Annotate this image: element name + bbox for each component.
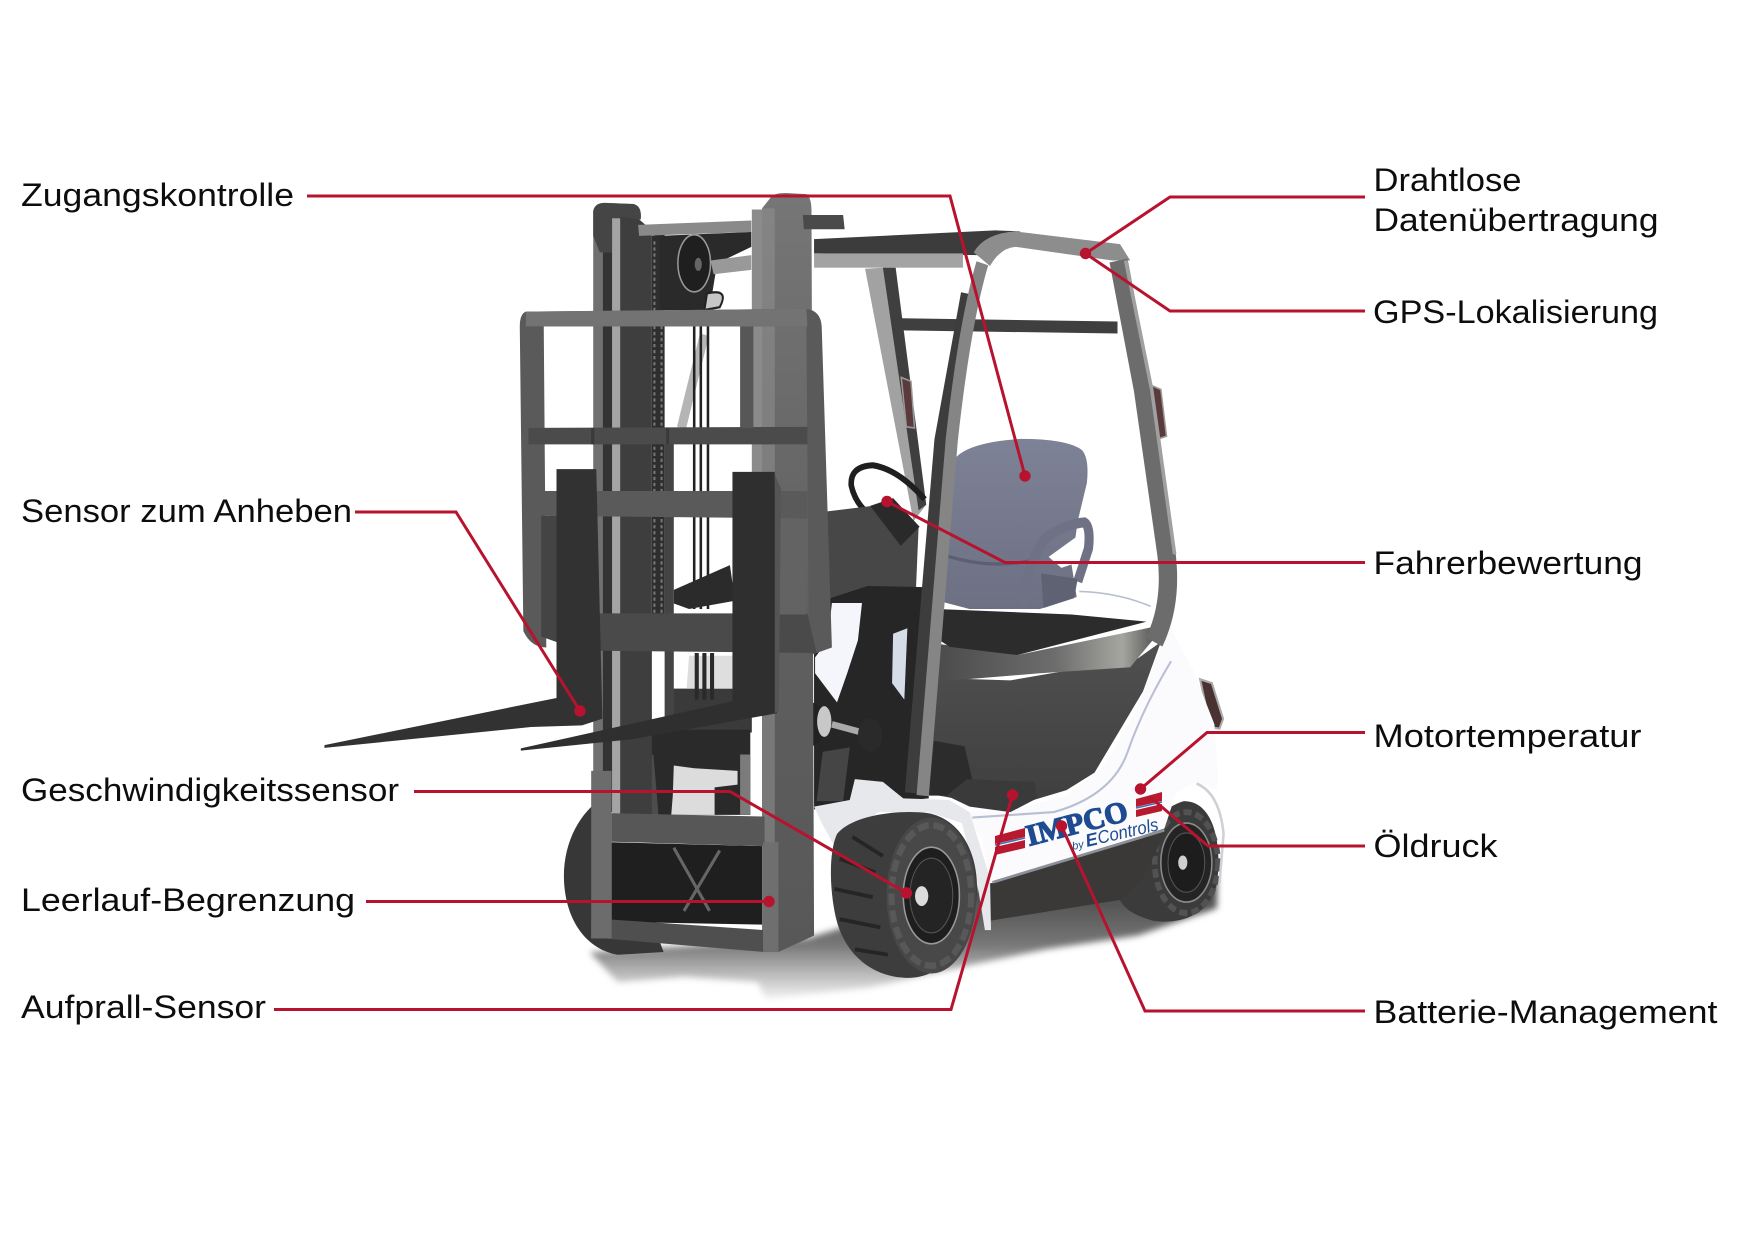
- forks: [324, 469, 781, 751]
- leader: Öldruck: [1150, 797, 1365, 846]
- logo: red stripes left: [995, 828, 1025, 855]
- underbody: [985, 831, 1166, 921]
- far front wheel: [564, 798, 664, 955]
- rear light: [1200, 679, 1223, 729]
- cabin rear lights: [901, 377, 1166, 439]
- seat: [938, 439, 1089, 609]
- white body shell: [964, 628, 1224, 883]
- logo: by Controls: E: [1083, 828, 1101, 851]
- logo: by Controls: by: [1071, 838, 1086, 853]
- label: Sensor zum Anheben: Sensor zum Anheben: [21, 493, 352, 529]
- leader: Drahtlose Datenübertragung: [1080, 197, 1365, 259]
- leader: Aufprall-Sensor: [274, 789, 1018, 1010]
- front wheel: [831, 812, 977, 978]
- label: Batterie-Management: Batterie-Management: [1374, 994, 1718, 1030]
- ground shadow: [590, 878, 1217, 999]
- cage front posts: [911, 263, 982, 796]
- label: Drahtlose Datenübertragung: Drahtlose: [1374, 162, 1522, 198]
- mast cross members: [591, 771, 778, 952]
- forklift illustration: [324, 193, 1224, 999]
- mast back interior: [612, 689, 763, 925]
- steering link: [787, 701, 882, 801]
- leader: Motortemperatur: [1135, 732, 1365, 795]
- mast left upright: [591, 203, 674, 938]
- leader: Leerlauf-Begrenzung: [366, 896, 775, 907]
- leader: Fahrerbewertung: [881, 496, 1365, 562]
- logo: IMPCO: IMPCO: [1022, 795, 1131, 853]
- fork carriage bars: [540, 491, 817, 653]
- far cage post: [865, 268, 926, 521]
- leader: Geschwindigkeitssensor: [414, 792, 912, 899]
- label: Aufprall-Sensor: Aufprall-Sensor: [21, 989, 266, 1025]
- hydraulic hoses: [687, 656, 732, 689]
- label: Drahtlose Datenübertragung: Datenübertragung: [1374, 202, 1658, 238]
- logo: red stripes right: [1136, 792, 1162, 817]
- load backrest: [520, 309, 832, 656]
- mast right upright: [752, 193, 845, 952]
- rear wheel: [1120, 801, 1218, 922]
- label: GPS-Lokalisierung: GPS-Lokalisierung: [1373, 294, 1658, 330]
- leader: Batterie-Management: [1056, 820, 1365, 1011]
- logo: by Controls: Controls: [1095, 814, 1160, 848]
- engine cover: [924, 591, 1161, 804]
- dashboard: [814, 498, 929, 809]
- steering wheel: [851, 465, 925, 513]
- chrome chassis: [814, 779, 991, 930]
- label: Zugangskontrolle: Zugangskontrolle: [21, 177, 294, 213]
- cage right post: [974, 231, 1175, 642]
- label: Fahrerbewertung: Fahrerbewertung: [1374, 545, 1642, 581]
- roof bars: [814, 230, 1118, 334]
- label: Öldruck: Öldruck: [1374, 828, 1499, 864]
- step: [947, 779, 1037, 812]
- label: Motortemperatur: Motortemperatur: [1374, 718, 1642, 754]
- leader: GPS-Lokalisierung: [1086, 254, 1365, 311]
- label: Geschwindigkeitssensor: Geschwindigkeitssensor: [21, 772, 399, 808]
- leader: Sensor zum Anheben: [355, 512, 586, 717]
- leader: Zugangskontrolle: [307, 196, 1031, 482]
- logo: by Controls: [1071, 814, 1160, 853]
- label: Drahtlose Datenübertragung: [1374, 162, 1658, 238]
- engine hood through mast: [674, 565, 735, 609]
- label: Leerlauf-Begrenzung: Leerlauf-Begrenzung: [21, 882, 355, 918]
- mast top beam and pulley: [638, 220, 751, 609]
- hose lines: [697, 653, 712, 700]
